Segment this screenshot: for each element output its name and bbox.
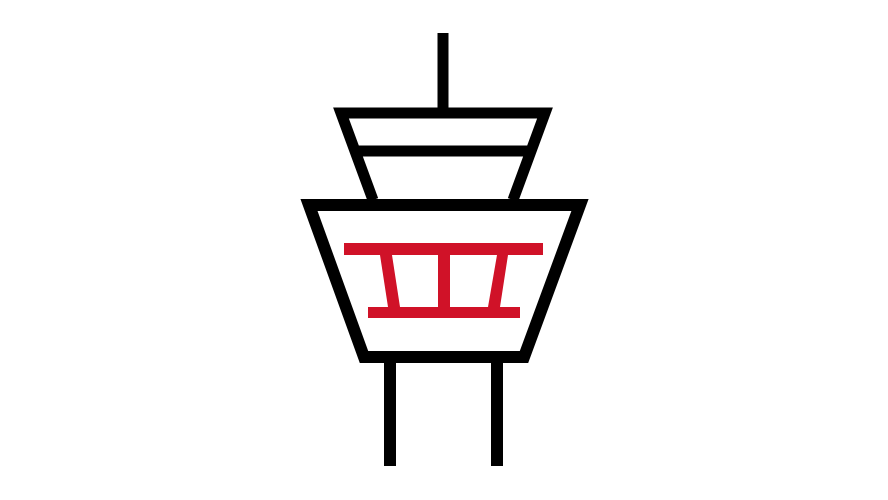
- icon: legs: [390, 357, 497, 466]
- icon: lower cabin: [309, 205, 580, 357]
- icon: antenna: [438, 33, 448, 110]
- icon: red gate: [344, 243, 543, 318]
- icon: upper cabin: [341, 113, 545, 200]
